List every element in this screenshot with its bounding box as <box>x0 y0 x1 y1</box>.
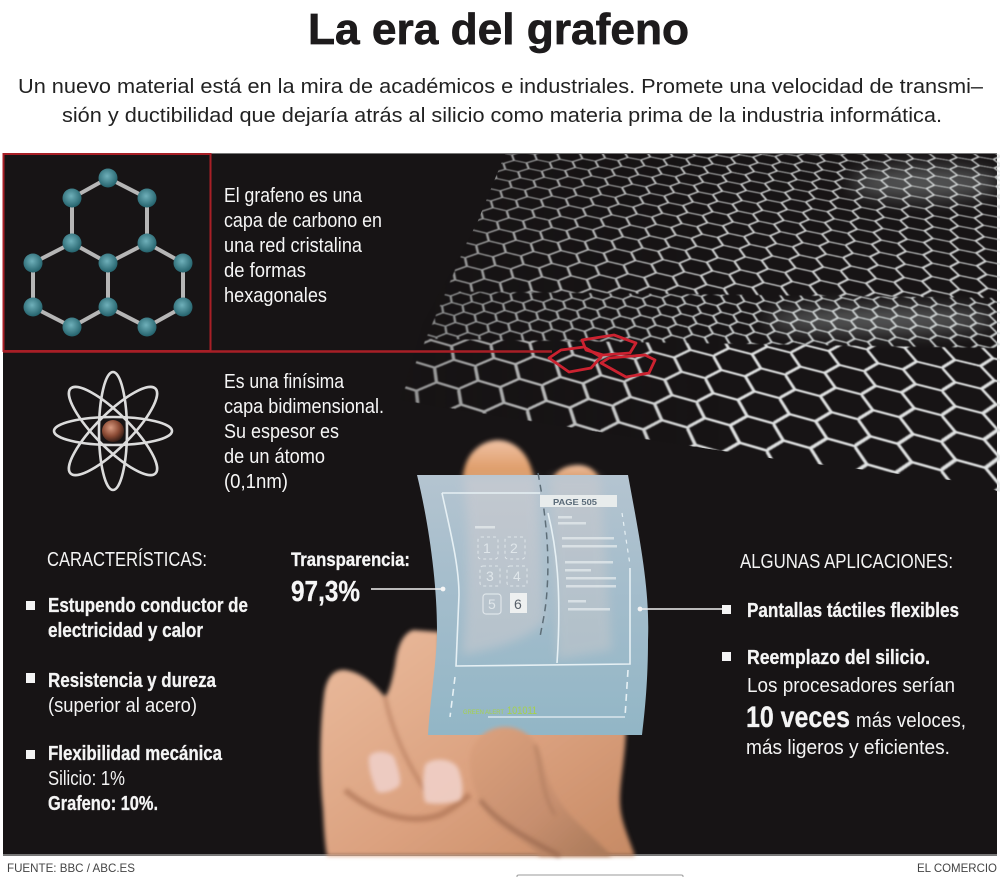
red highlighted hexagons <box>549 335 655 377</box>
index finger top <box>463 440 534 482</box>
item: reemplazo: Reemplazo del silicio. <box>747 647 930 669</box>
thumb <box>470 727 612 856</box>
nail: ring finger <box>369 752 400 793</box>
item: reemplazo <box>722 647 966 759</box>
panel: dark background <box>3 153 997 856</box>
graphene mesh sheet <box>404 154 1000 492</box>
screen number keys: 2 <box>510 540 518 556</box>
screen frame lines <box>442 493 630 717</box>
text: thickness: de un átomo <box>224 445 325 468</box>
item: resistencia: Resistencia y dureza <box>48 670 217 692</box>
screen green status text: 101011 <box>507 705 537 717</box>
screen number keys <box>478 537 527 614</box>
item: reemplazo: más ligeros y eficientes. <box>746 736 950 759</box>
icon: hexagonal carbon molecule <box>24 168 192 336</box>
item: reemplazo: más veloces, <box>856 709 966 732</box>
mesh light haze <box>765 167 1000 333</box>
callout: transparencia: Transparencia: <box>291 550 410 571</box>
icon: atom <box>54 372 172 490</box>
text: graphene definition: una red cristalina <box>224 234 363 257</box>
screen number keys: 3 <box>486 568 494 584</box>
item: flexibilidad: Silicio: 1% <box>48 768 125 790</box>
item: flexibilidad: Flexibilidad mecánica <box>48 743 223 765</box>
publisher credit: EL COMERCIO <box>917 861 997 875</box>
callout: transparencia: 97,3% <box>291 576 360 608</box>
subtitle: Un nuevo material está en la mira de académicos e industriales. Promete una velocidad de transmi– <box>18 76 984 98</box>
item: resistencia: (superior al acero) <box>48 695 197 717</box>
text: graphene definition: El grafeno es una <box>224 184 363 207</box>
transparent flexible screen <box>417 473 648 735</box>
text: graphene definition: hexagonales <box>224 284 327 307</box>
callout: transparencia <box>291 550 445 608</box>
item: conductor <box>26 595 248 642</box>
item: resistencia <box>26 670 217 717</box>
heading: ALGUNAS APLICACIONES: <box>740 551 953 573</box>
subtitle <box>18 76 984 127</box>
panel: algunas aplicaciones <box>638 551 966 759</box>
source credit: FUENTE: BBC / ABC.ES <box>7 861 135 875</box>
arrow to screen <box>371 587 445 591</box>
screen number keys: 6 <box>514 596 522 612</box>
text: graphene definition <box>224 184 382 307</box>
text: thickness: Es una finísima <box>224 370 345 393</box>
heading: CARACTERÍSTICAS: <box>47 548 207 571</box>
item: reemplazo: Los procesadores serían <box>747 674 955 697</box>
screen small text lines <box>475 516 617 610</box>
screen number keys: 5 <box>488 596 496 612</box>
nail: middle finger <box>423 760 462 804</box>
item: conductor: Estupendo conductor de <box>48 595 248 617</box>
item: reemplazo: 10 veces <box>746 701 850 734</box>
item: conductor: electricidad y calor <box>48 620 203 642</box>
panel: características <box>26 548 248 815</box>
screen title label: PAGE 505 <box>553 497 597 507</box>
text: graphene definition: capa de carbono en <box>224 209 382 232</box>
screen number keys: 4 <box>513 568 521 584</box>
item: flexibilidad <box>26 743 223 815</box>
title: La era del grafeno <box>308 5 689 54</box>
text: thickness: (0,1nm) <box>224 470 288 493</box>
text: thickness: Su espesor es <box>224 420 339 443</box>
text: graphene definition: de formas <box>224 259 306 282</box>
finger seen through screen <box>462 476 545 655</box>
text: thickness <box>224 370 384 493</box>
finger separation shading <box>385 697 425 790</box>
hand lower part <box>320 630 635 856</box>
item: flexibilidad: Grafeno: 10%. <box>48 793 158 815</box>
screen title label <box>540 495 617 507</box>
item: pantallas with arrow: Pantallas táctiles flexibles <box>747 600 959 622</box>
text: thickness: capa bidimensional. <box>224 395 384 418</box>
screen number keys: 1 <box>483 540 491 556</box>
item: pantallas with arrow <box>638 600 959 622</box>
screen green status text: GREEN ALERT <box>463 709 504 716</box>
screen green status text <box>463 705 537 717</box>
subtitle: sión y ductibilidad que dejaría atrás al silicio como materia prima de la industria informática. <box>62 105 942 127</box>
second finger top <box>552 465 600 480</box>
red highlight frame and connector line <box>3 154 552 352</box>
